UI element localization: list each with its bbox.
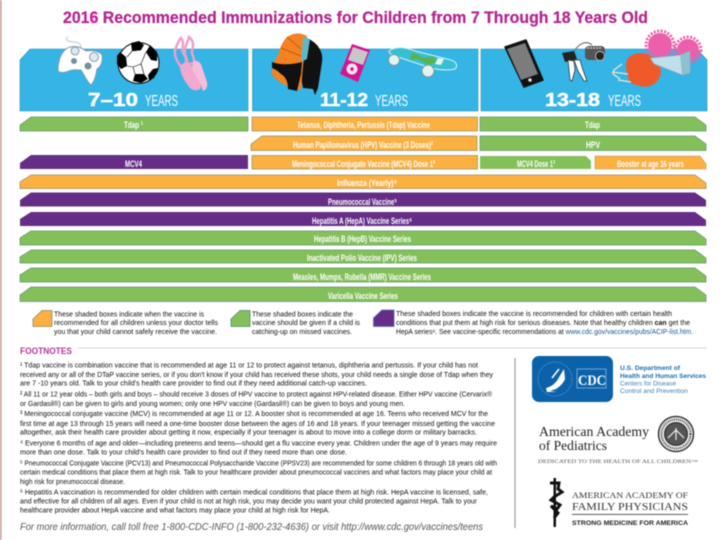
footnotes text xyxy=(20,360,497,514)
bar: influenza xyxy=(20,175,706,189)
logo: CDC and HHS: Control and Prevention xyxy=(620,389,688,395)
bar: varicella: Varicella Vaccine Series xyxy=(328,291,398,302)
panel: 13-18 years header xyxy=(481,49,707,111)
legend text: health conditions: HepA series⁶. See vaccine-specific recommendations at www.cdc.gov/vaccines/pubs/ACIP-list.htm. xyxy=(396,327,693,336)
icon: soccer ball xyxy=(117,41,159,84)
bar: MCV4 dose 1 13-18 xyxy=(480,156,591,170)
icon: megaphone xyxy=(650,51,690,75)
bar: hepatitis B: Hepatitis B (HepB) Vaccine Series xyxy=(314,234,411,245)
icon: game controller xyxy=(58,37,102,85)
row: HPV xyxy=(251,136,706,151)
legend: catch-up xyxy=(231,310,360,336)
bar: HPV 13-18 xyxy=(480,136,706,151)
contact line: For more information, call toll free 1-800-CDC-INFO (1-800-232-4636) or visit http://www.cdc.gov/vaccines/teens xyxy=(20,521,484,533)
footnotes text: healthcare provider about HepA vaccine and what factors may place your child at high risk for HepA. xyxy=(20,506,330,514)
legend swatch: green xyxy=(231,310,250,326)
bar: hepatitis A: Hepatitis A (HepA) Vaccine Series⁶ xyxy=(312,216,412,227)
bar: MCV4 11-12 xyxy=(252,156,478,170)
bar: Tdap 13-18 xyxy=(480,117,706,131)
title: 2016 Recommended Immunizations for Children from 7 Through 18 Years Old xyxy=(63,8,648,27)
logo: American Academy of Pediatrics: of Pediatrics xyxy=(539,439,607,454)
logo: American Academy of Family Physicians: AMERICAN ACADEMY OF xyxy=(572,490,688,500)
legend text: health conditions: conditions that put them at high risk for serious diseases. Note that healthy children can get the xyxy=(396,318,690,327)
bar: Tdap 7-10: Tdap ¹ xyxy=(124,120,143,131)
logo: American Academy of Family Physicians xyxy=(550,478,689,527)
logo: CDC and HHS: CDC xyxy=(578,373,606,389)
row: MCV4 xyxy=(20,155,706,170)
legend text: catch-up: These shaded boxes indicate the xyxy=(252,310,353,318)
footnotes text: and effective for all children of all ages. Even if your child is not at high risk, you may decide you want your child protected against HepA. Talk to your xyxy=(20,496,477,506)
legend: health conditions xyxy=(374,309,693,336)
footnotes text: certain medical conditions that place them at high risk. Talk to your healthcare provider about pneumococcal vaccines and what factors may place your child at xyxy=(20,468,493,476)
legend text: catch-up: catching-up on missed vaccines. xyxy=(252,327,352,336)
logo: American Academy of Pediatrics: American Academy xyxy=(539,425,649,440)
footnotes text: ¹ Tdap vaccine is combination vaccine that is recommended at age 11 or 12 to protect against tetanus, diphtheria and pertussis. If your child has not xyxy=(20,360,479,370)
panel: 7-10 years header xyxy=(20,49,248,111)
legend text: recommended for all: you that your child cannot safely receive the vaccine. xyxy=(54,327,217,336)
age label: 11-12 years: 11-12 xyxy=(320,90,368,110)
panel: 11-12 years header xyxy=(252,49,478,111)
legend text: health conditions xyxy=(396,309,693,336)
footnotes text: first time at age 13 through 15 years will need a one-time booster dose between the ages of 16 and 18 years. If your teenager missed getting the vaccine xyxy=(20,419,495,428)
bar: MMR: Measles, Mumps, Rubella (MMR) Vaccine Series xyxy=(293,272,431,283)
bar: influenza: Influenza (Yearly)⁴ xyxy=(337,178,397,189)
icon: pompoms xyxy=(646,31,701,63)
bar: HPV 13-18: HPV xyxy=(586,140,600,151)
footnotes text: or Gardasil®) can be given to girls and young women; only one HPV vaccine (Gardasil®) can be given to boys and young men. xyxy=(20,399,405,408)
bar: Tdap 7-10 xyxy=(20,117,248,131)
logo: American Academy of Pediatrics: DEDICATED TO THE HEALTH OF ALL CHILDREN™ xyxy=(538,459,698,465)
legend text: recommended for all: recommended for all children unless your doctor tells xyxy=(54,318,218,327)
logo: American Academy of Pediatrics xyxy=(538,416,698,465)
logo: CDC and HHS: U.S. Department of xyxy=(620,365,681,372)
bar: HPV 11-12: Human Papillomavirus (HPV) Vaccine (3 Doses)² xyxy=(293,140,433,151)
bar: Tdap 11-12 xyxy=(252,117,478,131)
footnotes text: more than one dose. Talk to your child's health care provider to find out if they need more than one dose. xyxy=(20,448,347,456)
footnotes text: high risk for pneumococcal disease. xyxy=(20,477,125,486)
logo: CDC and HHS xyxy=(532,356,707,402)
bar: HPV 11-12 xyxy=(251,136,477,151)
icon: ballet shoes xyxy=(175,37,207,91)
legend text: recommended for all xyxy=(54,310,218,336)
legend text: catch-up: vaccine should be given if a child is xyxy=(252,318,360,327)
footnotes text: ⁶ Hepatitis A vaccination is recommended for older children with certain medical conditions that place them at high risk. HepA vaccine is licensed, safe, xyxy=(20,488,488,496)
bar: booster at age 16 xyxy=(595,156,706,170)
legend swatch: orange xyxy=(33,310,52,326)
logo: CDC and HHS: Health and Human Services xyxy=(620,373,707,380)
legend text: recommended for all: These shaded boxes indicate when the vaccine is xyxy=(54,310,204,318)
icon: smartphone xyxy=(505,40,543,87)
icon: football helmet xyxy=(612,53,661,87)
icon: backpack xyxy=(272,33,322,95)
bar: MMR xyxy=(20,268,706,283)
age label: 13-18 years: 13-18 xyxy=(545,90,600,110)
legend text: health conditions: These shaded boxes indicate the vaccine is recommended for children with certain health xyxy=(396,309,672,318)
bar: hepatitis B xyxy=(20,231,706,245)
bar: pneumococcal xyxy=(20,192,706,208)
age label: 7-10 years: YEARS xyxy=(145,93,178,110)
footnotes text: ⁴ Everyone 6 months of age and older—including preteens and teens—should get a flu vaccine every year. Children under the age of 9 years may require xyxy=(20,438,497,448)
footnotes text: ² All 11 or 12 year olds – both girls and boys – should receive 3 doses of HPV vaccine to protect against HPV-related disease. Either HPV vaccine (Cervarix® xyxy=(20,390,492,398)
icon: keys xyxy=(562,43,605,81)
legend swatch: purple xyxy=(374,310,394,326)
footnotes text: ⁵ Pneumococcal Conjugate Vaccine (PCV13) and Pneumococcal Polysaccharide Vaccine (PPSV23) are recommended for some children 6 through 18 years old with xyxy=(20,458,497,468)
age label: 7-10 years: 7–10 xyxy=(88,90,138,110)
age label: 11-12 years xyxy=(320,90,408,110)
bar: inactivated polio: Inactivated Polio Vaccine (IPV) Series xyxy=(307,253,417,264)
bar: varicella xyxy=(20,287,706,302)
age label: 7-10 years xyxy=(88,90,178,110)
legend: recommended for all xyxy=(33,310,218,336)
legend text: catch-up xyxy=(252,310,360,336)
bar: MCV4 7-10 xyxy=(20,155,248,170)
footnotes text: are 7 -10 years old. Talk to your child's health care provider to find out if they need additional catch-up vaccines. xyxy=(20,378,367,388)
icon: music player xyxy=(340,44,370,82)
bar: pneumococcal: Pneumococcal Vaccine⁵ xyxy=(328,197,397,208)
footnotes text: ³ Meningococcal conjugate vaccine (MCV) is recommended at age 11 or 12. A booster shot is recommended at age 16. Teens who received MCV for the xyxy=(20,409,488,418)
icon: skateboard xyxy=(388,48,457,77)
footnotes text: altogether, ask their health care provider about getting it now, especially if your teenager is about to move into a college dorm or military barracks. xyxy=(20,428,477,436)
bar: Tdap 11-12: Tetanus, Diphtheria, Pertussis (Tdap) Vaccine xyxy=(297,120,430,131)
logo: American Academy of Family Physicians: FAMILY PHYSICIANS xyxy=(572,502,688,513)
age label: 13-18 years xyxy=(545,90,641,110)
row: Tdap xyxy=(20,117,706,131)
bar: MCV4 dose 1 13-18: MCV4 Dose 1³ xyxy=(517,159,555,170)
bar: hepatitis A xyxy=(20,212,706,227)
age label: 13-18 years: YEARS xyxy=(608,93,641,110)
bar: MCV4 7-10: MCV4 xyxy=(125,159,142,170)
bar: Tdap 13-18: Tdap xyxy=(585,120,600,131)
logo: CDC and HHS: Centers for Disease xyxy=(620,382,677,388)
age label: 11-12 years: YEARS xyxy=(375,93,408,110)
footnotes text: received any or all of the DTaP vaccine series, or if you don't know if your child has received these shots, your child needs a single dose of Tdap when they xyxy=(20,370,493,379)
bar: MCV4 11-12: Meningococcal Conjugate Vaccine (MCV4) Dose 1³ xyxy=(292,159,435,170)
footnotes heading: FOOTNOTES xyxy=(20,346,72,356)
bar: inactivated polio xyxy=(20,250,706,264)
logo: American Academy of Family Physicians: STRONG MEDICINE FOR AMERICA xyxy=(572,521,689,527)
